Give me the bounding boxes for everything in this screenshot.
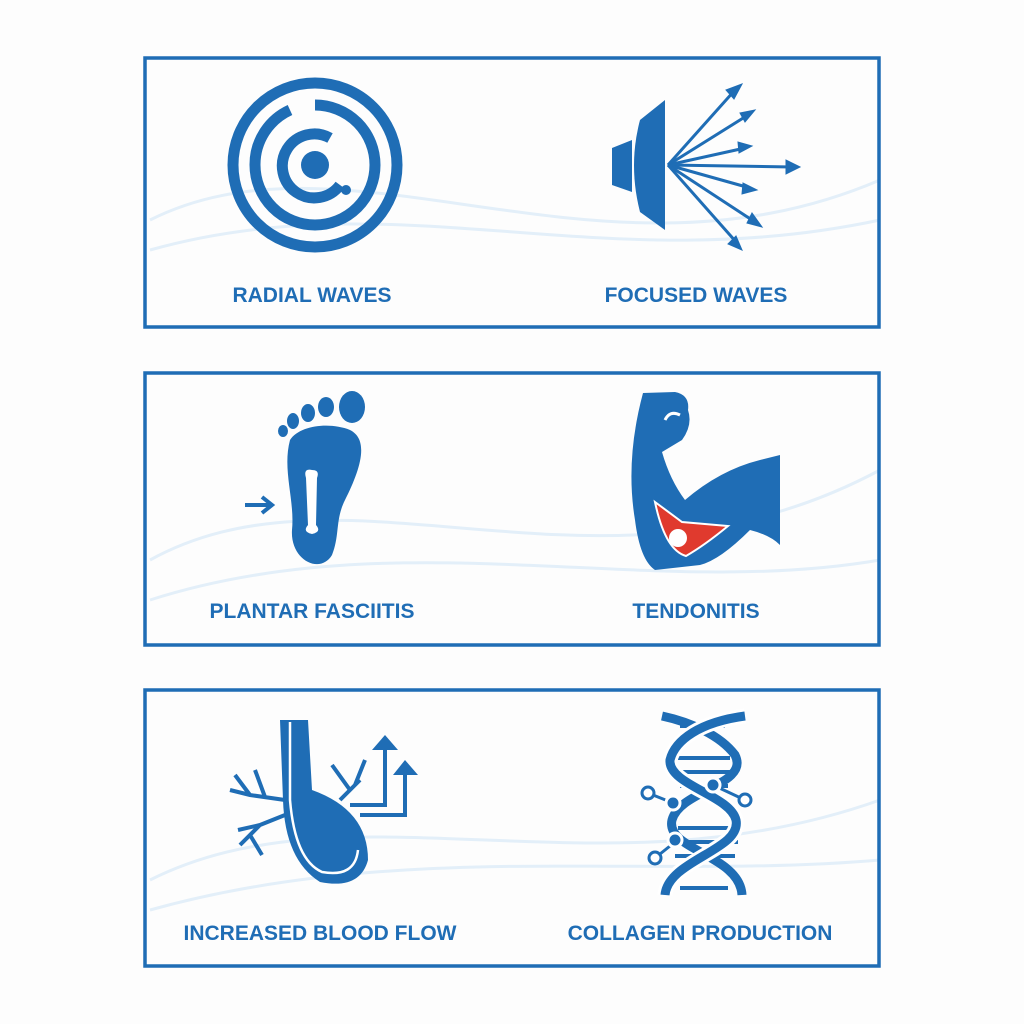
label: tendonitis: TENDONITIS [632, 600, 760, 623]
icon: DNA [642, 716, 751, 895]
icon: focused waves [612, 84, 800, 250]
label: increased blood flow: INCREASED BLOOD FLOW [184, 922, 457, 945]
label: radial waves: RADIAL WAVES [232, 284, 392, 307]
label: collagen production: COLLAGEN PRODUCTION [568, 922, 832, 945]
panel: conditions [145, 373, 879, 645]
icon: blood flow [230, 720, 418, 884]
panel: waves types [145, 58, 879, 327]
icon: foot [245, 391, 365, 564]
label: plantar fasciitis: PLANTAR FASCIITIS [210, 600, 414, 623]
icon: flexed arm [631, 392, 780, 570]
panel: benefits [145, 690, 879, 966]
label: focused waves: FOCUSED WAVES [605, 284, 787, 307]
icon: radial waves [233, 83, 397, 247]
background waves [150, 180, 880, 910]
